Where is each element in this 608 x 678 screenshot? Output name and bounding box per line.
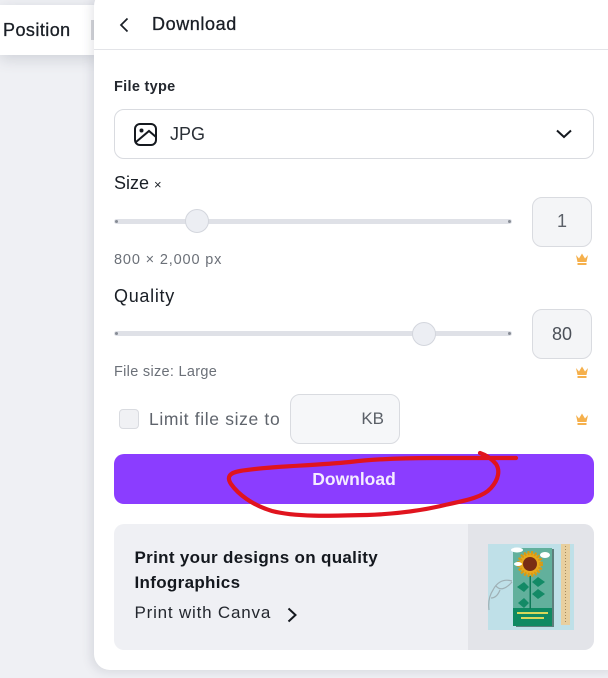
- panel header: [94, 0, 608, 50]
- download button: Download: [312, 469, 396, 489]
- panel: print promo: [114, 524, 594, 650]
- promo heading: Infographics: [134, 573, 240, 592]
- dropdown value: JPG: [170, 124, 205, 144]
- icon: image: [134, 123, 157, 146]
- icon: back arrow: [120, 18, 128, 32]
- quality slider: [114, 322, 512, 346]
- promo heading: Print your designs on quality: [134, 548, 378, 567]
- quality value: 80: [552, 324, 572, 344]
- label: file type: File type: [114, 79, 176, 95]
- promo heading: [134, 548, 378, 592]
- file size note: File size: Large: [114, 364, 217, 380]
- size value: [532, 197, 592, 247]
- thumbnail: infographic mockup: [488, 544, 574, 630]
- download button: [114, 454, 594, 504]
- label: quality: Quality: [114, 286, 175, 306]
- heading: download: Download: [152, 14, 237, 34]
- slider track: [114, 331, 512, 336]
- icon: chevron right: [288, 608, 297, 622]
- quality value: [532, 309, 592, 359]
- slider track: [114, 219, 512, 224]
- icon: chevron down: [556, 130, 572, 138]
- toolbar: position: [0, 5, 100, 55]
- label: size: Size ×: [114, 173, 162, 193]
- toolbar divider chip: [91, 20, 95, 40]
- size value: 1: [557, 211, 567, 231]
- promo link: Print with Canva: [134, 603, 271, 622]
- slider thumb: [412, 322, 436, 346]
- limit input: [290, 394, 400, 444]
- size dimensions: 800 × 2,000 px: [114, 252, 222, 268]
- size slider: [114, 209, 512, 233]
- icon: crown: [576, 414, 588, 425]
- promo thumbnail area: [468, 524, 594, 650]
- slider thumb: [185, 209, 209, 233]
- limit input: KB: [361, 409, 384, 428]
- limit label: Limit file size to: [149, 409, 280, 429]
- limit checkbox: [119, 409, 139, 429]
- file type dropdown: [114, 109, 594, 159]
- icon: crown: [576, 366, 588, 378]
- icon: crown: [576, 254, 588, 265]
- toolbar label: Position: [3, 20, 71, 40]
